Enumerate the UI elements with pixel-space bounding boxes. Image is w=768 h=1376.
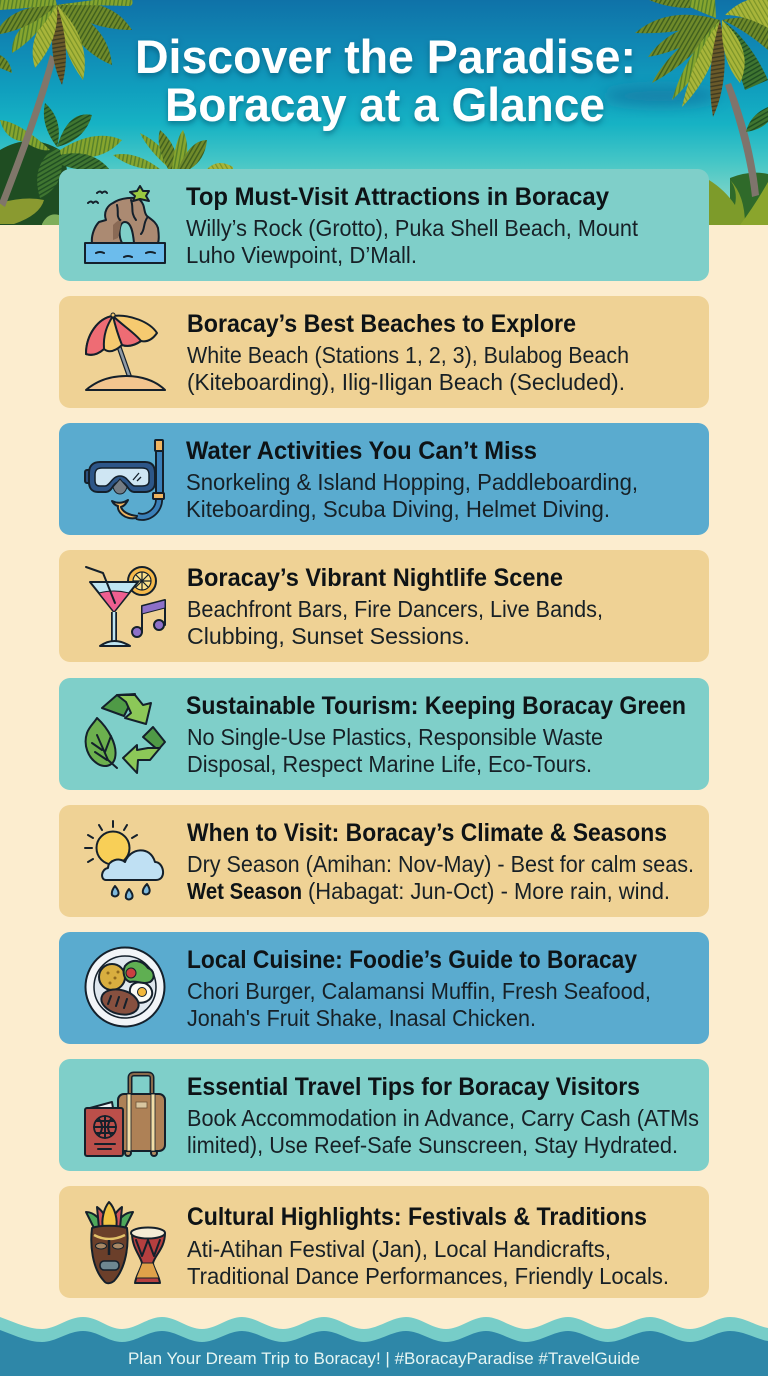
heading: Top Must-Visit Attractions in Boracay: [186, 183, 609, 211]
right bushes: [709, 173, 768, 225]
right tall palm: [635, 0, 768, 197]
panel: climate: [59, 805, 709, 917]
panel: beaches: [59, 296, 709, 408]
panel: attractions: Luho Viewpoint, D’Mall.: [186, 242, 417, 268]
description: No Single-Use Plastics, Responsible Waste: [187, 724, 603, 750]
panel: climate: Wet Season: [187, 878, 302, 904]
heading: Cultural Highlights: Festivals & Traditions: [187, 1203, 647, 1231]
description: Snorkeling & Island Hopping, Paddleboarding,: [186, 469, 638, 495]
panel: attractions: [59, 169, 709, 281]
description: Willy’s Rock (Grotto), Puka Shell Beach, Mount: [186, 215, 639, 241]
left lower palm: [0, 103, 122, 225]
panel: cuisine: Jonah's Fruit Shake, Inasal Chicken.: [187, 1005, 536, 1031]
description: White Beach (Stations 1, 2, 3), Bulabog Beach: [187, 342, 629, 368]
icon: cocktail and music note: [86, 567, 165, 646]
icon: passport and suitcase: [85, 1074, 165, 1156]
heading: Sustainable Tourism: Keeping Boracay Green: [186, 692, 686, 720]
header: tropical beach scene: [0, 0, 768, 225]
icon: snorkel mask: [85, 440, 164, 518]
icon: food plate: [86, 948, 164, 1026]
heading: When to Visit: Boracay’s Climate & Seasons: [187, 819, 667, 847]
panel: travel tips: limited), Use Reef-Safe Sunscreen, Stay Hydrated.: [187, 1132, 678, 1158]
panel: water activities: [59, 423, 709, 535]
heading: Boracay’s Best Beaches to Explore: [187, 310, 576, 338]
panel: nightlife: Clubbing, Sunset Sessions.: [187, 623, 470, 649]
icon: tribal mask and drum: [86, 1202, 165, 1283]
panel: sustainability: [59, 678, 709, 790]
description: Book Accommodation in Advance, Carry Cash (ATMs: [187, 1105, 699, 1131]
panel: nightlife: [59, 550, 709, 662]
description: Dry Season (Amihan: Nov-May) - Best for calm seas.: [187, 851, 694, 877]
panel: climate: (Habagat: Jun-Oct) - More rain, wind.: [308, 878, 670, 904]
title: [135, 30, 636, 131]
middle small palm: [113, 130, 233, 169]
panel: culture: [59, 1186, 709, 1298]
panel: sustainability: Disposal, Respect Marine Life, Eco-Tours.: [187, 751, 592, 777]
footer text: Plan Your Dream Trip to Boracay! | #BoracayParadise #TravelGuide: [128, 1349, 640, 1368]
panel: culture: Traditional Dance Performances, Friendly Locals.: [187, 1263, 669, 1289]
heading: Water Activities You Can’t Miss: [186, 437, 537, 465]
heading: Essential Travel Tips for Boracay Visitors: [187, 1073, 640, 1101]
panel: water activities: Kiteboarding, Scuba Diving, Helmet Diving.: [186, 496, 610, 522]
description: Beachfront Bars, Fire Dancers, Live Bands,: [187, 596, 603, 622]
heading: Boracay’s Vibrant Nightlife Scene: [187, 564, 563, 592]
icon: rock arch: [85, 186, 165, 263]
title: Discover the Paradise:: [135, 30, 636, 83]
description: Ati-Atihan Festival (Jan), Local Handicrafts,: [187, 1236, 611, 1262]
footer banner with waves: [0, 1317, 768, 1376]
title: Boracay at a Glance: [165, 78, 605, 131]
icon: sun, cloud and rain: [85, 821, 163, 900]
left tall palm: [0, 0, 132, 207]
panel: beaches: (Kiteboarding), Ilig-Iligan Beach (Secluded).: [187, 369, 625, 395]
panel: travel tips: [59, 1059, 709, 1171]
description: Chori Burger, Calamansi Muffin, Fresh Seafood,: [187, 978, 651, 1004]
panel: cuisine: [59, 932, 709, 1044]
heading: Local Cuisine: Foodie’s Guide to Boracay: [187, 946, 637, 974]
icon: recycling arrows and leaf: [86, 694, 165, 773]
icon: beach umbrella: [86, 313, 165, 390]
